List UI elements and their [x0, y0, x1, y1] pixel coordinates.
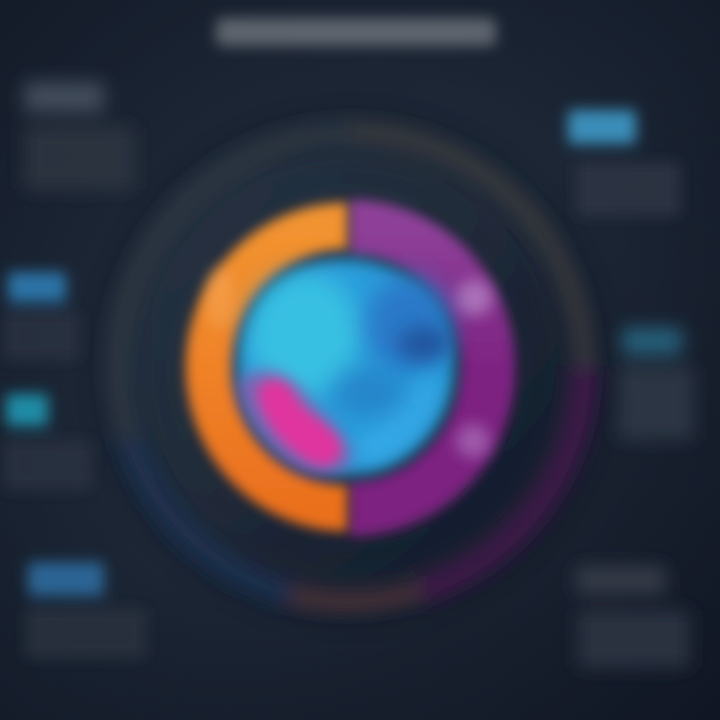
panel: top left label [24, 82, 134, 190]
pink segment [258, 380, 340, 465]
panel: middle right label [618, 328, 694, 440]
orange left half ring [209, 226, 347, 508]
globe lower light patch [358, 372, 433, 462]
panel: bottom left label [26, 562, 146, 658]
ring highlights [206, 268, 492, 458]
panel: top right label [568, 110, 680, 216]
soft halo behind rings [118, 136, 582, 600]
globe light cyan side [249, 273, 361, 397]
globe middle shade [332, 368, 404, 416]
panel: bottom right label [576, 566, 690, 668]
panel: middle left label [4, 272, 80, 360]
purple right half ring [350, 227, 488, 509]
globe dark blue patch [366, 277, 450, 373]
blue globe [238, 259, 454, 475]
chart: circular diagram [118, 132, 584, 601]
globe deep blue spot [398, 326, 450, 362]
panel: lower left label [4, 394, 92, 490]
purple halo around pink [238, 371, 352, 474]
title [216, 18, 496, 46]
outer faint ring [118, 132, 584, 601]
